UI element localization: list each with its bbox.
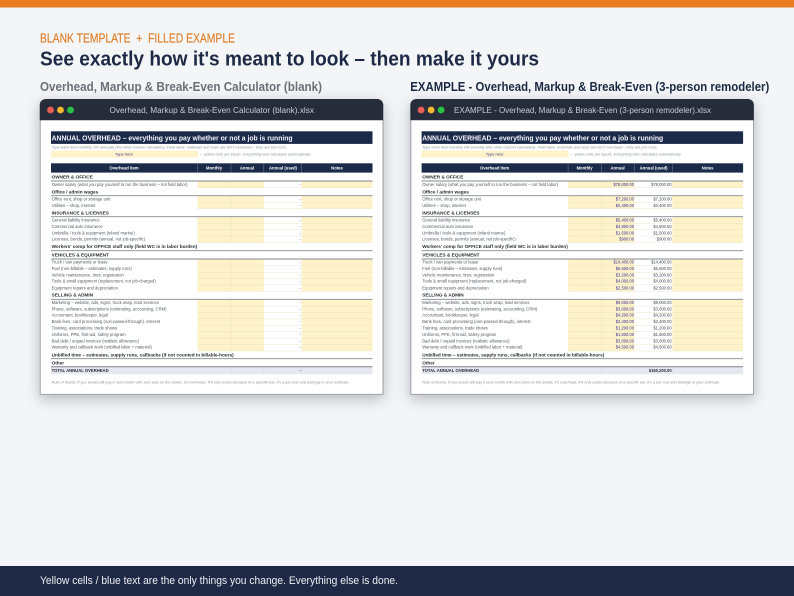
row labels: Other xyxy=(422,361,435,366)
panel: filled example spreadsheet window xyxy=(410,99,754,395)
used column dashes: - xyxy=(300,345,302,350)
sheet title band: ANNUAL OVERHEAD – everything you pay whether or not a job is running xyxy=(52,135,293,142)
annual used values: $3,600.00 xyxy=(653,306,672,311)
row labels: Workers' comp for OFFICE staff only (field WC is in labor burden) xyxy=(52,244,198,249)
row labels: Unbilled time – estimates, supply runs, callbacks (if not counted in billable-hours) xyxy=(422,352,605,357)
yellow input cells xyxy=(198,181,372,351)
footer bar xyxy=(0,566,794,596)
heading: filled example: EXAMPLE - Overhead, Markup & Break-Even (3-person remodeler) xyxy=(410,80,769,94)
annual input values: $4,500.00 xyxy=(616,345,635,350)
row labels: Umbrella / tools & equipment (inland marine) xyxy=(52,230,135,235)
annual input values: $9,000.00 xyxy=(616,300,635,305)
row labels: Office / admin wages xyxy=(422,189,469,194)
annual used values: $1,200.00 xyxy=(653,325,672,330)
row labels xyxy=(52,174,234,373)
table header: Annual xyxy=(610,166,625,170)
row labels: INSURANCE & LICENSES xyxy=(422,210,480,215)
row labels: Commercial auto insurance xyxy=(422,224,474,229)
annual input values: $1,500.00 xyxy=(616,230,635,235)
annual used values: $4,800.00 xyxy=(653,224,672,229)
used column dashes: - xyxy=(300,224,302,229)
table header: Annual (used) xyxy=(269,166,298,170)
row labels: Uniforms, PPE, first-aid, safety program xyxy=(422,332,497,337)
annual used values: $4,000.00 xyxy=(653,279,672,284)
type here input xyxy=(422,151,569,158)
used column dashes: - xyxy=(300,237,302,242)
row labels: Owner salary (what you pay yourself to run the business – not field labor) xyxy=(52,182,188,187)
row labels: Utilities – shop, internet xyxy=(52,203,96,208)
row labels: Training, associations, trade shows xyxy=(422,325,488,330)
table header: Overhead item xyxy=(109,166,139,170)
row labels: Licenses, bonds, permits (annual, not job-specific) xyxy=(422,237,516,242)
used column dashes: - xyxy=(300,279,302,284)
annual used values: $9,000.00 xyxy=(653,300,672,305)
row labels: Tools & small equipment (replacement, not job-charged) xyxy=(52,279,156,284)
type here input: Type here xyxy=(115,152,134,157)
row labels: Warranty and callback work (unbilled labor + material) xyxy=(52,345,152,350)
row labels: Licenses, bonds, permits (annual, not job-specific) xyxy=(52,237,146,242)
row labels: Truck / van payments or lease xyxy=(52,260,108,265)
table header: Monthly xyxy=(577,166,593,170)
row labels: Utilities – shop, internet xyxy=(422,203,467,208)
annual input values: $4,800.00 xyxy=(616,224,635,229)
row labels: Warranty and callback work (unbilled labor + material) xyxy=(422,345,523,350)
used column dashes: - xyxy=(300,272,302,277)
used column dashes: - xyxy=(300,313,302,318)
annual used values xyxy=(649,182,672,373)
row labels: Workers' comp for OFFICE staff only (field WC is in labor burden) xyxy=(422,244,568,249)
sheet title band xyxy=(422,131,743,144)
annual input values: $78,000.00 xyxy=(614,182,635,187)
row labels: Uniforms, PPE, first-aid, safety program xyxy=(52,332,126,337)
used column dashes: - xyxy=(300,218,302,223)
footer text: Yellow cells / blue text are the only things you change. Everything else is done. xyxy=(40,575,398,587)
annual used values: $78,000.00 xyxy=(651,182,672,187)
row labels: Bank fees, card processing (non-passed-through), interest xyxy=(422,319,531,324)
annual used values: $160,200.00 xyxy=(649,368,672,373)
row labels: Accountant, bookkeeper, legal xyxy=(422,313,479,318)
annual used values: $2,400.00 xyxy=(653,203,672,208)
row labels: Fuel (non-billable – estimates, supply runs) xyxy=(52,266,132,271)
spreadsheet: filled xyxy=(422,131,743,385)
used column dashes: - xyxy=(300,197,302,202)
row labels: Truck / van payments or lease xyxy=(422,260,479,265)
row labels: Accountant, bookkeeper, legal xyxy=(52,313,108,318)
annual input values: $3,600.00 xyxy=(616,306,635,311)
rule of thumb note: Rule of thumb: if you would still pay it next month with zero jobs on the books, it's overhead. If it only exists because of a specific job, it's a job cost and belongs in your estimate. xyxy=(52,381,350,385)
instructions: Type each item monthly OR annually (the other column calculates). Field labor, materials and subs are NOT overhead – they are job costs. xyxy=(422,146,658,150)
row labels: Bank fees, card processing (non-passed-through), interest xyxy=(52,319,161,324)
table header: Monthly xyxy=(206,166,223,170)
row labels: Marketing – website, ads, signs, truck wrap, lead services xyxy=(422,300,529,305)
row labels: Other xyxy=(52,361,64,366)
row labels: Phone, software, subscriptions (estimating, accounting, CRM) xyxy=(422,306,538,311)
row labels: Unbilled time – estimates, supply runs, callbacks (if not counted in billable-hours) xyxy=(52,352,234,357)
used column dashes: - xyxy=(300,285,302,290)
used column dashes: - xyxy=(300,325,302,330)
row labels: General liability insurance xyxy=(422,218,471,223)
used column dashes: - xyxy=(300,338,302,343)
instructions: Type each item monthly OR annually (the other column calculates). Field labor, materials and subs are NOT overhead – they are job costs. xyxy=(52,146,287,150)
annual input values: $6,500.00 xyxy=(616,266,635,271)
annual input values: $1,200.00 xyxy=(616,325,635,330)
panel: blank spreadsheet window xyxy=(40,99,383,395)
table header: Annual (used) xyxy=(640,166,668,170)
icon: window controls xyxy=(418,107,444,113)
used column dashes: - xyxy=(300,230,302,235)
row labels: TOTAL ANNUAL OVERHEAD xyxy=(52,368,109,373)
top orange bar xyxy=(0,0,794,8)
row labels: Owner salary (what you pay yourself to run the business – not field labor) xyxy=(422,182,559,187)
annual used values: $4,200.00 xyxy=(653,313,672,318)
used column dashes: - xyxy=(300,203,302,208)
annual input values: $2,400.00 xyxy=(616,319,635,324)
annual used values: $4,500.00 xyxy=(653,345,672,350)
window frame xyxy=(40,99,383,395)
legend note: ← yellow cells are inputs. Everything else calculates automatically. xyxy=(199,153,311,157)
used column dashes: - xyxy=(300,182,302,187)
annual input values: $14,400.00 xyxy=(614,260,635,265)
window file name: Overhead, Markup & Break-Even Calculator (blank).xlsx xyxy=(110,105,315,115)
annual used values: $900.00 xyxy=(657,237,672,242)
annual input values: $3,000.00 xyxy=(616,338,635,343)
annual input values: $7,200.00 xyxy=(616,197,635,202)
table header: Notes xyxy=(331,166,343,170)
row labels: Office rent, shop or storage unit xyxy=(52,197,111,202)
row labels: Vehicle maintenance, tires, registration xyxy=(422,272,495,277)
yellow input cells xyxy=(568,181,743,351)
total row background xyxy=(422,367,743,374)
row labels: General liability insurance xyxy=(52,218,100,223)
table header xyxy=(422,163,743,173)
used column dashes: - xyxy=(300,306,302,311)
row labels: Umbrella / tools & equipment (inland marine) xyxy=(422,230,506,235)
annual used values: $1,500.00 xyxy=(653,332,672,337)
row labels: Equipment repairs and depreciation xyxy=(52,285,119,290)
type here input xyxy=(51,151,198,158)
used column dashes xyxy=(300,182,302,373)
window file name: EXAMPLE - Overhead, Markup & Break-Even (3-person remodeler).xlsx xyxy=(454,105,712,115)
annual used values: $7,200.00 xyxy=(653,197,672,202)
annual input values xyxy=(614,182,635,350)
row labels: Marketing – website, ads, signs, truck wrap, lead services xyxy=(52,300,159,305)
eyebrow: BLANK TEMPLATE + FILLED EXAMPLE xyxy=(40,32,235,46)
table header: Notes xyxy=(702,166,714,170)
row labels: Bad debt / unpaid invoices (realistic allowance) xyxy=(422,338,510,343)
annual input values: $900.00 xyxy=(619,237,635,242)
row labels xyxy=(422,174,605,373)
used column dashes: - xyxy=(300,266,302,271)
row labels: SELLING & ADMIN xyxy=(422,293,464,298)
sheet title band: ANNUAL OVERHEAD – everything you pay whether or not a job is running xyxy=(422,135,663,142)
annual input values: $2,500.00 xyxy=(616,285,635,290)
row labels: Training, associations, trade shows xyxy=(52,325,117,330)
row labels: Tools & small equipment (replacement, not job-charged) xyxy=(422,279,527,284)
title: See exactly how it's meant to look – then make it yours xyxy=(40,48,539,70)
row labels: Vehicle maintenance, tires, registration xyxy=(52,272,124,277)
row labels: VEHICLES & EQUIPMENT xyxy=(422,252,480,257)
annual input values: $4,000.00 xyxy=(616,279,635,284)
used column dashes: - xyxy=(300,319,302,324)
annual used values: $3,000.00 xyxy=(653,338,672,343)
used column dashes: - xyxy=(300,332,302,337)
annual used values: $6,500.00 xyxy=(653,266,672,271)
total row background xyxy=(51,367,372,374)
sheet title band xyxy=(51,131,372,144)
annual input values: $2,400.00 xyxy=(616,203,635,208)
row labels: Fuel (non-billable – estimates, supply runs) xyxy=(422,266,503,271)
row labels: TOTAL ANNUAL OVERHEAD xyxy=(422,368,479,373)
annual input values: $1,500.00 xyxy=(616,332,635,337)
table header: Overhead item xyxy=(480,166,509,170)
used column dashes: - xyxy=(300,368,302,373)
window frame xyxy=(410,99,754,395)
icon: window controls xyxy=(47,107,74,113)
annual input values: $5,400.00 xyxy=(616,218,635,223)
row labels: Office / admin wages xyxy=(52,189,99,194)
annual used values: $3,200.00 xyxy=(653,272,672,277)
row labels: INSURANCE & LICENSES xyxy=(52,210,109,215)
annual used values: $5,400.00 xyxy=(653,218,672,223)
row labels: VEHICLES & EQUIPMENT xyxy=(52,252,109,257)
rule of thumb note: Rule of thumb: if you would still pay it next month with zero jobs on the books, it's overhead. If it only exists because of a specific job, it's a job cost and belongs in your estimate. xyxy=(422,381,720,385)
row labels: Commercial auto insurance xyxy=(52,224,103,229)
used column dashes: - xyxy=(300,300,302,305)
row labels: Office rent, shop or storage unit xyxy=(422,197,482,202)
row labels: SELLING & ADMIN xyxy=(52,293,94,298)
row labels: Phone, software, subscriptions (estimating, accounting, CRM) xyxy=(52,306,167,311)
annual used values: $14,400.00 xyxy=(651,260,672,265)
row labels: Bad debt / unpaid invoices (realistic allowance) xyxy=(52,338,140,343)
annual used values: $1,500.00 xyxy=(653,230,672,235)
spreadsheet: blank xyxy=(51,131,372,385)
heading: blank template: Overhead, Markup & Break-Even Calculator (blank) xyxy=(40,80,322,94)
row labels: OWNER & OFFICE xyxy=(52,174,93,179)
annual used values: $2,500.00 xyxy=(653,285,672,290)
type here input: Type here xyxy=(486,152,504,157)
table header xyxy=(51,163,372,173)
annual used values: $2,400.00 xyxy=(653,319,672,324)
row labels: Equipment repairs and depreciation xyxy=(422,285,489,290)
row labels: OWNER & OFFICE xyxy=(422,174,463,179)
table header: Annual xyxy=(240,166,254,170)
legend note: ← yellow cells are inputs. Everything else calculates automatically. xyxy=(570,153,682,157)
annual input values: $3,200.00 xyxy=(616,272,635,277)
used column dashes: - xyxy=(300,260,302,265)
annual input values: $4,200.00 xyxy=(616,313,635,318)
